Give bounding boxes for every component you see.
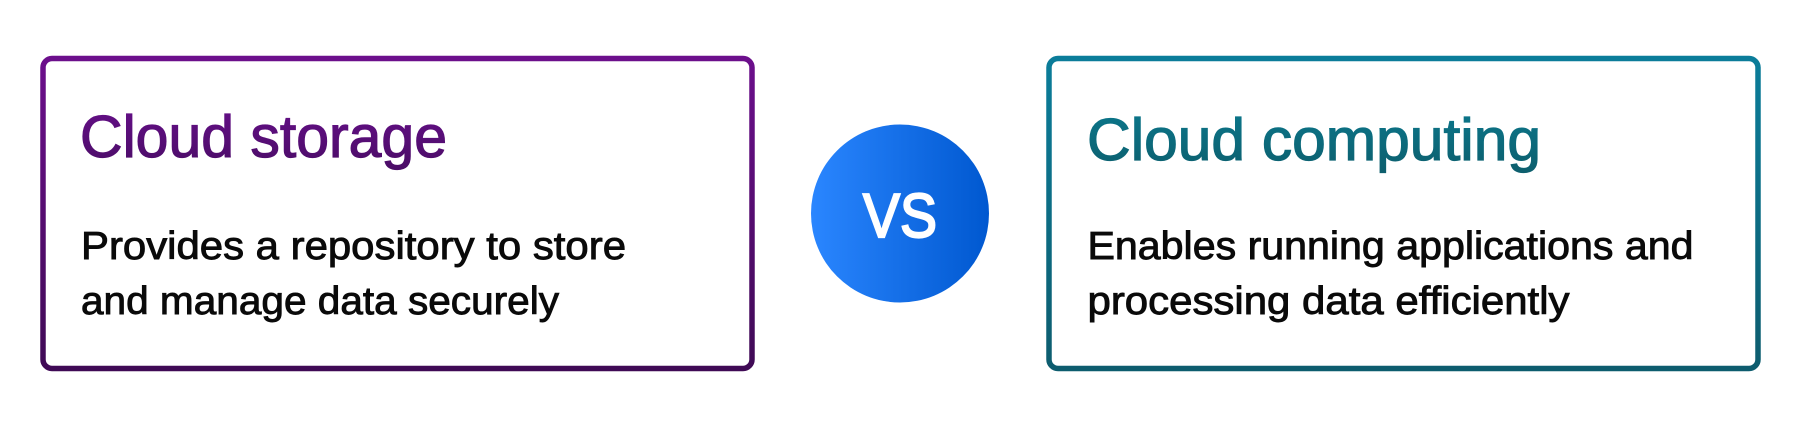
heading: cloud storage: Cloud storage — [80, 104, 447, 170]
description: cloud storage — [81, 225, 626, 323]
panel: cloud storage — [43, 58, 752, 368]
description: cloud storage: and manage data securely — [81, 280, 560, 323]
vs badge — [811, 124, 989, 302]
panel border — [1049, 58, 1758, 368]
panel border — [43, 58, 752, 368]
panel: cloud computing — [1049, 58, 1758, 368]
heading: cloud computing: Cloud computing — [1087, 107, 1541, 173]
description: cloud computing: Enables running applications and — [1088, 225, 1694, 268]
description: cloud computing — [1088, 225, 1694, 323]
description: cloud storage: Provides a repository to store — [81, 225, 626, 268]
vs badge: VS — [863, 182, 937, 251]
description: cloud computing: processing data efficiently — [1088, 280, 1570, 323]
